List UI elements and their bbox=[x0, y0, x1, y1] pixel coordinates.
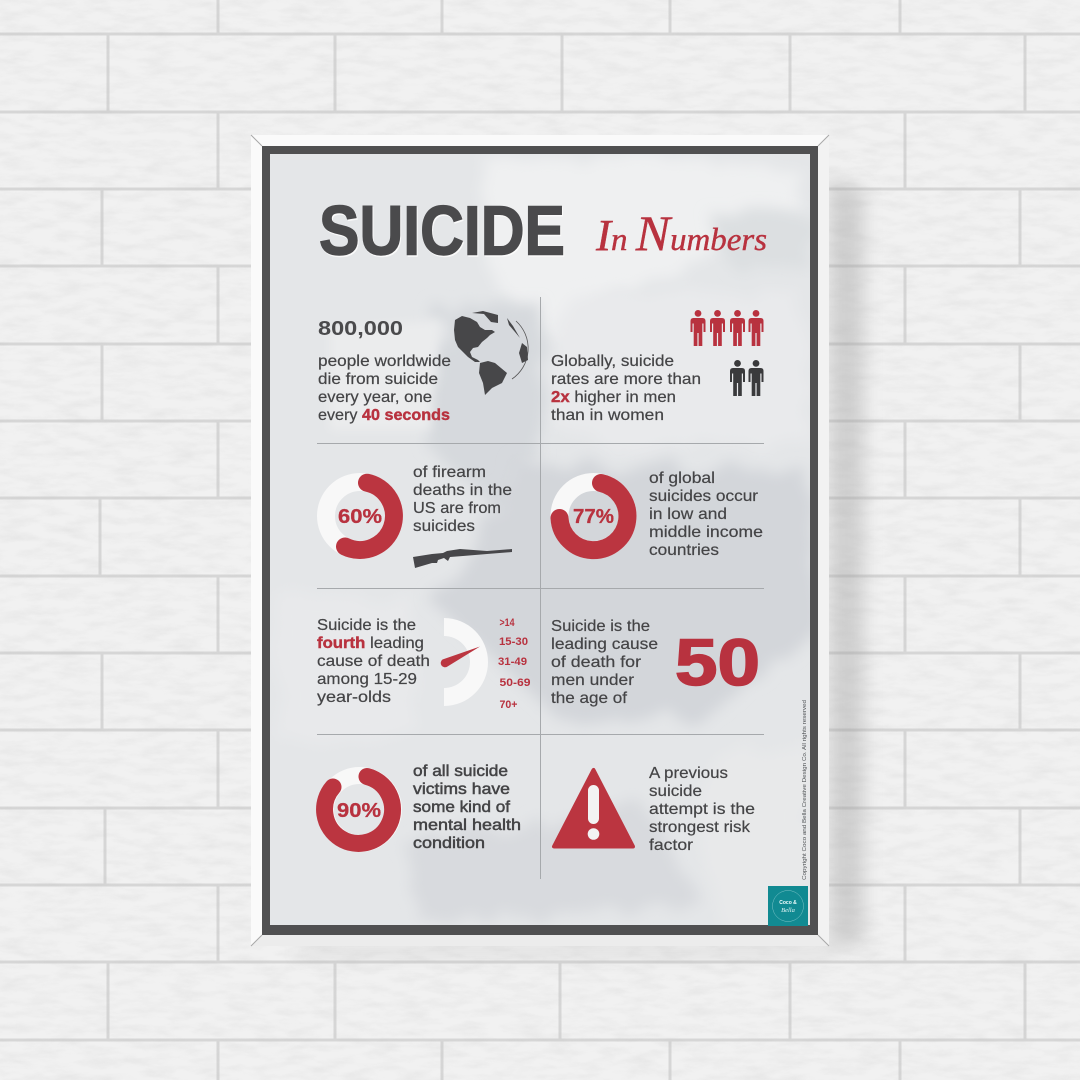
text: leading cause under 50 bbox=[551, 618, 658, 707]
text: fourth leading cause: cause of death bbox=[317, 653, 430, 670]
panel: men vs women rates: rates are more than bbox=[551, 371, 701, 388]
panel: 800,000 bbox=[318, 317, 451, 424]
panel: 800,000: die from suicide bbox=[318, 371, 438, 388]
gauge age labels: >14 bbox=[500, 617, 515, 629]
text: leading cause under 50: of death for bbox=[551, 654, 642, 671]
text: leading cause under 50: Suicide is the bbox=[551, 618, 650, 635]
donut: 90% bbox=[325, 776, 394, 844]
panel: men vs women rates: than in women bbox=[551, 407, 664, 424]
text: previous attempt: A previous bbox=[649, 765, 728, 782]
picture frame bbox=[251, 135, 829, 946]
logo badge: Coco & bbox=[779, 900, 797, 906]
text: previous attempt: suicide bbox=[649, 783, 702, 800]
donut: 77%: 77% bbox=[573, 506, 614, 528]
text: mental health condition: victims have bbox=[413, 781, 510, 798]
text: mental health condition: of all suicide bbox=[413, 763, 508, 780]
text: low and middle income: in low and bbox=[649, 506, 727, 523]
big number 50: 50 bbox=[675, 625, 760, 699]
text: low and middle income: suicides occur bbox=[649, 488, 759, 505]
panel: men vs women rates: Globally, suicide bbox=[551, 353, 674, 370]
text: fourth leading cause: year-olds bbox=[317, 689, 391, 706]
text: low and middle income: of global bbox=[649, 470, 715, 487]
text: mental health condition: mental health bbox=[413, 817, 521, 834]
text: firearm deaths: of firearm bbox=[413, 464, 486, 481]
icon: warning triangle bbox=[554, 770, 633, 846]
donut: 60%: 60% bbox=[338, 506, 382, 528]
icon: globe bbox=[454, 311, 528, 395]
text: low and middle income: middle income bbox=[649, 524, 763, 541]
text: previous attempt: factor bbox=[649, 837, 694, 854]
text: fourth leading cause bbox=[317, 617, 430, 706]
frame shadow bbox=[300, 175, 864, 955]
text: firearm deaths bbox=[413, 464, 512, 535]
panel: 800,000: people worldwide bbox=[318, 353, 451, 370]
text: firearm deaths: suicides bbox=[413, 518, 475, 535]
title: SUICIDE bbox=[320, 193, 566, 271]
paper with watercolour wash bbox=[270, 154, 810, 925]
donut: 90%: 90% bbox=[337, 800, 381, 822]
text: mental health condition bbox=[413, 763, 521, 852]
panel: 800,000: 800,000 bbox=[318, 317, 403, 340]
text: previous attempt: attempt is the bbox=[649, 801, 755, 818]
title: SUICIDE bbox=[319, 192, 565, 270]
icon: rifle bbox=[413, 549, 512, 568]
gauge age labels: 31-49 bbox=[498, 656, 527, 668]
text: firearm deaths: US are from bbox=[413, 500, 501, 517]
text: fourth leading cause: among 15-29 bbox=[317, 671, 417, 688]
panel: 800,000: every 40 seconds bbox=[318, 407, 450, 424]
text: mental health condition: condition bbox=[413, 835, 485, 852]
text: previous attempt bbox=[649, 765, 755, 854]
logo badge bbox=[768, 886, 808, 926]
text: leading cause under 50: leading cause bbox=[551, 636, 658, 653]
divider lines bbox=[317, 297, 764, 879]
donut: 60% bbox=[326, 482, 394, 550]
logo badge: Bella bbox=[781, 907, 795, 914]
gauge age labels: 50-69 bbox=[500, 677, 530, 689]
icon: dark figures bbox=[730, 360, 764, 396]
donut: 77% bbox=[560, 482, 628, 550]
panel: men vs women rates bbox=[551, 353, 701, 424]
subtitle script: In Numbers bbox=[595, 205, 767, 261]
icon: red figures bbox=[690, 310, 764, 346]
text: firearm deaths: deaths in the bbox=[413, 482, 512, 499]
gauge age labels: 70+ bbox=[500, 699, 518, 711]
text: low and middle income bbox=[649, 470, 763, 559]
copyright vertical note: Copyright Coco and Bella Creative Design Co. All rights reserved bbox=[802, 700, 808, 880]
text: low and middle income: countries bbox=[649, 542, 719, 559]
text: leading cause under 50: men under bbox=[551, 672, 635, 689]
panel: 800,000: every year, one bbox=[318, 389, 432, 406]
gauge age labels bbox=[498, 617, 530, 711]
text: leading cause under 50: the age of bbox=[551, 690, 628, 707]
panel: men vs women rates: 2x higher in men bbox=[551, 389, 676, 406]
gauge age labels: 15-30 bbox=[499, 636, 528, 648]
gauge chart bbox=[441, 618, 488, 706]
text: mental health condition: some kind of bbox=[413, 799, 511, 816]
text: previous attempt: strongest risk bbox=[649, 819, 751, 836]
text: fourth leading cause: fourth leading bbox=[317, 635, 424, 652]
text: fourth leading cause: Suicide is the bbox=[317, 617, 416, 634]
